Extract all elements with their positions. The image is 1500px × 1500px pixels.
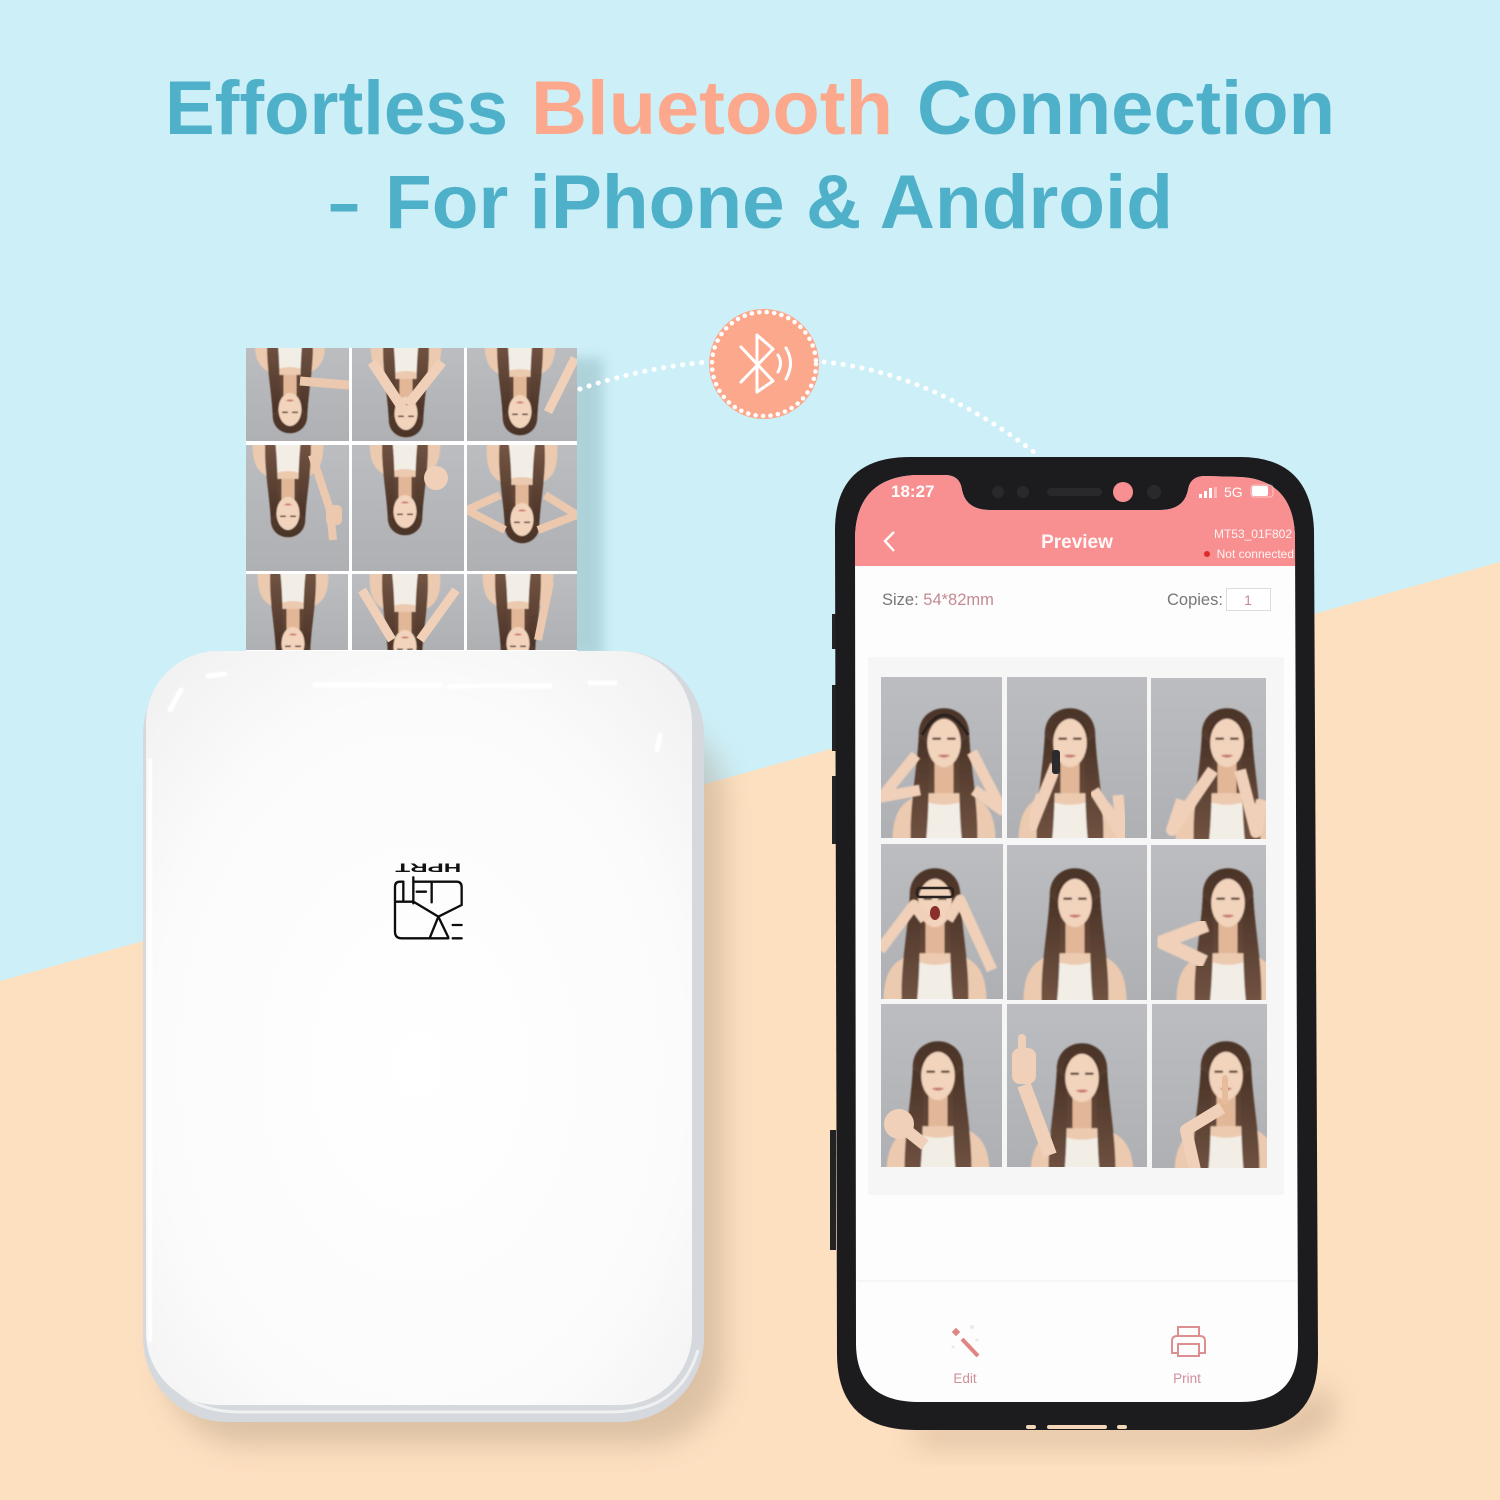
icon: bluetooth badge <box>709 309 819 419</box>
photo preview sheet <box>857 657 1297 1282</box>
print button <box>1172 1327 1205 1386</box>
printer brand logo <box>394 860 462 938</box>
preview photo row 2 <box>880 844 1280 1026</box>
edit button: Edit <box>953 1371 977 1386</box>
device name: MT53_01F802 <box>1214 527 1292 541</box>
title: Effortless <box>165 66 508 151</box>
status bar time: 18:27 <box>891 482 934 501</box>
title: – <box>329 160 359 245</box>
phone bottom speaker slots <box>1026 1425 1127 1429</box>
title: For iPhone & Android <box>385 160 1173 245</box>
phone body <box>835 457 1318 1430</box>
printer <box>143 651 725 1445</box>
preview photo row 1 <box>881 677 1279 866</box>
size label: Size: 54*82mm <box>882 591 994 609</box>
title: Connection <box>917 66 1335 151</box>
copies control <box>1167 588 1270 610</box>
phone side buttons <box>830 614 837 1250</box>
back arrow <box>885 532 894 551</box>
printed photo strip <box>246 325 603 670</box>
edit button <box>952 1325 978 1386</box>
printer lower edge highlight <box>160 1350 698 1412</box>
strip photo row 2 <box>246 427 577 571</box>
strip photo row 1 <box>246 325 577 441</box>
preview photo row 3 <box>881 1004 1278 1201</box>
notch camera and sensors <box>992 482 1161 502</box>
copies control: Copies: <box>1167 591 1223 609</box>
print button: Print <box>1173 1371 1201 1386</box>
app header bar <box>855 475 1295 566</box>
status bar signal and battery: 5G <box>1224 484 1243 500</box>
smartphone <box>830 457 1335 1446</box>
title: Bluetooth <box>531 66 893 151</box>
printer top highlights <box>150 674 660 1340</box>
printer front face <box>146 651 692 1405</box>
screen title: Preview <box>1041 532 1113 553</box>
status bar signal and battery <box>1199 484 1273 500</box>
copies control: 1 <box>1244 592 1252 608</box>
dotted connection line: printer to bluetooth <box>580 362 708 389</box>
strip photo row 3 <box>246 559 577 670</box>
connection status: Not connected <box>1217 547 1294 561</box>
printer side and edge <box>143 651 704 1422</box>
printer brand logo: HPRT <box>394 860 461 874</box>
dotted connection line: bluetooth to phone <box>824 362 1038 455</box>
title <box>165 66 1335 245</box>
phone screen <box>855 475 1298 1402</box>
